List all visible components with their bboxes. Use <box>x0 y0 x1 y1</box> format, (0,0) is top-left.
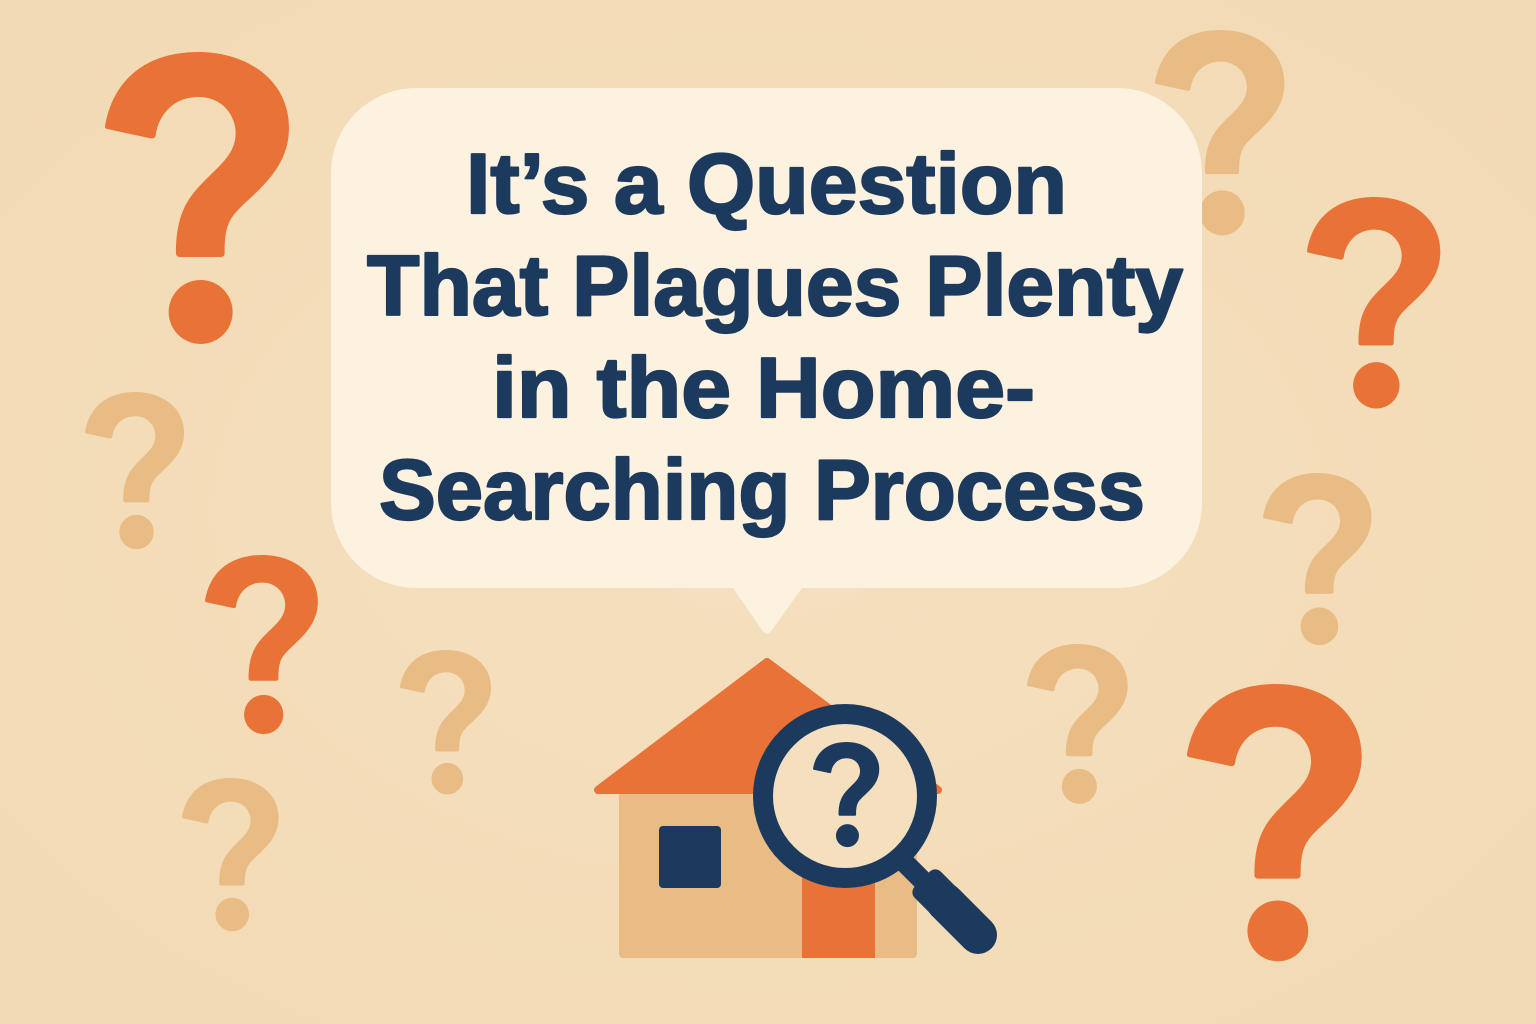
icon: faded question mark, right <box>1263 473 1371 645</box>
icon: magnifying glass with question mark <box>763 714 978 935</box>
question mark in lens <box>813 742 879 847</box>
house door <box>802 860 875 958</box>
title: Searching Process <box>379 443 1145 538</box>
house window <box>659 826 721 888</box>
title: in the Home- <box>492 341 1035 436</box>
icon: large orange question mark, bottom right <box>1187 684 1362 961</box>
house roof <box>598 662 938 790</box>
icon: faded question mark, top right behind bubble <box>1155 30 1284 235</box>
icon: faded question mark, bottom left <box>182 778 279 931</box>
title: It’s a Question <box>466 137 1067 232</box>
icon: orange question mark, lower left <box>205 555 318 734</box>
magnifier handle <box>900 858 978 935</box>
icon: house <box>598 662 938 958</box>
title <box>367 137 1183 538</box>
speech bubble with pointer <box>331 88 1202 634</box>
house body <box>619 790 917 958</box>
icon: orange question mark, upper right <box>1307 197 1440 409</box>
icon: faded question mark, left of house <box>400 650 491 795</box>
icon: faded question mark, right of house <box>1027 644 1128 804</box>
magnifier lens <box>763 714 927 878</box>
icon: large orange question mark, top left <box>105 52 289 344</box>
title: That Plagues Plenty <box>367 239 1183 334</box>
icon: faded question mark, left <box>85 392 184 549</box>
